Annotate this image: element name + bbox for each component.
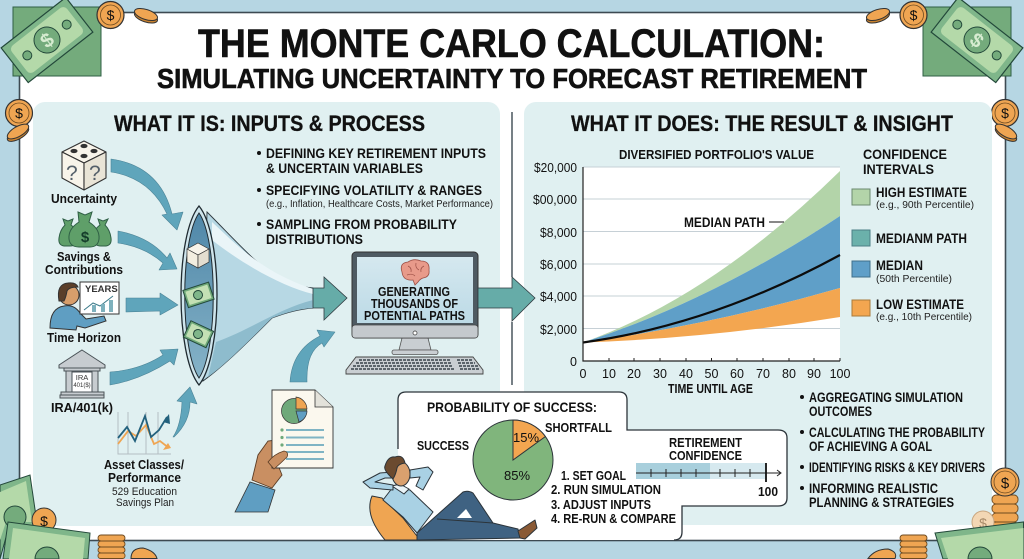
thumb [268,451,288,469]
arrow: assets [173,387,197,437]
pie chart [473,420,553,500]
input: time horizon [47,282,121,345]
arrow: document [290,330,335,382]
decoration: top-left money: $ [36,29,59,53]
y axis labels: $2,000 [540,323,577,337]
legend: high estimate [852,185,974,211]
pie chart: 15% [513,430,539,445]
y axis labels: $20,000 [534,161,577,175]
legend: confidence intervals: INTERVALS [863,161,934,177]
icon: brain [401,260,429,285]
cone shadow [208,300,313,377]
pie labels: SHORTFALL [545,420,612,435]
x axis labels: 40 [679,367,693,381]
icon: dice [62,141,106,190]
title [157,22,867,94]
screen text: THOUSANDS OF [371,297,458,311]
icon: bank [59,350,105,398]
x axis labels: 20 [627,367,641,381]
median path label: MEDIAN PATH [684,215,765,230]
x axis labels: 60 [730,367,744,381]
panel: what it is [33,102,500,526]
band: median [583,216,840,342]
x axis labels: 90 [807,367,821,381]
legend: median [852,258,952,285]
icon: dice: ? [66,162,78,185]
legend: confidence intervals: CONFIDENCE [863,146,947,162]
heading: PROBABILITY OF SUCCESS: [427,399,597,415]
arrow: savings [118,231,177,270]
document in hand [235,390,333,512]
steps list: 2. RUN SIMULATION [551,482,661,497]
bullet list: insights: OUTCOMES [809,404,872,419]
torso [383,487,433,533]
funnel mouth [181,206,217,385]
input: asset classes: Savings Plan [116,497,174,509]
bullet list: inputs: SAMPLING FROM PROBABILITY [266,216,458,232]
document [272,390,333,468]
computer [346,252,483,374]
document pie icon [282,397,307,424]
decoration: bottom-right money: $ [979,515,987,531]
decoration: top-left money: $ [15,105,23,121]
document lines [286,430,324,459]
y axis labels: $4,000 [540,290,577,304]
retirement confidence gauge: CONFIDENCE [669,448,742,463]
shoe [518,520,537,539]
axes [583,167,840,361]
divider [511,112,513,385]
x axis labels: 50 [705,367,718,381]
x axis labels: 100 [830,367,850,381]
icon: small bill [183,321,214,348]
x axis labels: 70 [756,367,770,381]
bullet list: inputs: & UNCERTAIN VARIABLES [266,160,423,176]
arrow: time horizon [126,293,178,315]
icon: money bags: $ [81,229,90,246]
right arm [410,467,433,490]
steps list: 3. ADJUST INPUTS [551,497,651,512]
monitor [352,252,478,338]
decoration: bottom-right money [868,468,1024,559]
y axis labels: $8,000 [540,226,577,240]
input: asset classes [104,412,184,509]
legend: high estimate: (e.g., 90th Percentile) [876,199,974,211]
icon: small bill [183,282,214,308]
panel: what it does [524,102,992,525]
funnel cone [203,212,313,381]
screen text: POTENTIAL PATHS [364,309,465,323]
steps list [551,468,676,526]
x axis title: TIME UNTIL AGE [668,381,753,396]
left arm [363,472,395,490]
panel: probability of success [398,392,787,540]
keyboard [346,357,483,374]
input: savings and contributions: Contributions [45,263,123,277]
bullet list: insights: OF ACHIEVING A GOAL [809,439,932,454]
median line [583,255,840,342]
input: savings and contributions [45,212,123,277]
x axis labels [580,367,850,381]
arrow: IRA [110,349,178,385]
decoration: top-left money: $ [107,7,115,23]
heading: what it does: WHAT IT DOES: THE RESULT & INSIGHT [571,111,953,136]
bullet list: inputs [257,145,493,247]
retirement confidence gauge: RETIREMENT [669,435,742,450]
retirement confidence gauge [636,435,781,499]
steps list: 1. SET GOAL [561,468,626,483]
icon: person with chart: YEARS [85,284,118,295]
head [392,462,410,486]
y axis labels: 0 [570,355,577,369]
steps list: 4. RE-RUN & COMPARE [551,511,676,526]
bullet list: inputs: DEFINING KEY RETIREMENT INPUTS [266,145,486,161]
plot area [583,167,840,361]
x ticks [609,358,840,361]
illustration: relaxing man [363,456,537,540]
icon: bank: IRA [76,373,88,382]
icon: small dice [187,243,209,268]
x axis labels: 30 [653,367,667,381]
input: time horizon: Time Horizon [47,331,121,345]
input: savings and contributions: Savings & [57,250,111,264]
icon: dice: ? [89,162,101,185]
decoration: bottom-left money: $ [40,513,48,529]
panel: probability of success: SUCCESS [417,438,469,453]
bullet list: inputs: (e.g., Inflation, Healthcare Costs, Market Performance) [266,198,493,210]
legend: medianm path: MEDIANM PATH [876,231,967,246]
hair [385,456,405,479]
legend: median: (50th Percentile) [876,273,952,285]
input: uncertainty [51,141,117,206]
screen text: GENERATING [378,285,450,299]
beanbag [370,496,420,540]
bullet list: insights: AGGREGATING SIMULATION [809,390,963,405]
decoration: top-left money [1,0,159,144]
band: low estimate [583,288,840,342]
arrows into funnel [110,159,335,437]
pie chart: 85% [504,468,530,483]
arrow: uncertainty [111,159,183,230]
hand [252,440,288,488]
cone highlight [212,222,313,294]
decoration: bottom-right money: $ [1001,475,1010,492]
y axis labels [533,161,577,369]
input: asset classes: Asset Classes/ [104,458,184,472]
legs [417,491,520,540]
icon: line chart [118,412,171,454]
title: THE MONTE CARLO CALCULATION: [198,22,825,66]
input: uncertainty: Uncertainty [51,192,117,206]
input: IRA/401(k): IRA/401(k) [51,400,113,415]
legend: low estimate: LOW ESTIMATE [876,297,964,312]
y axis labels: $6,000 [540,258,577,272]
decoration: top-right money: $ [1001,105,1009,121]
legend: confidence intervals [852,146,974,323]
title: SIMULATING UNCERTAINTY TO FORECAST RETIREMENT [157,63,867,94]
bullet list: insights: INFORMING REALISTIC [809,481,938,496]
screen text [364,285,465,323]
bullet list: inputs: SPECIFYING VOLATILITY & RANGES [266,182,482,198]
document dots [280,428,284,447]
legend: median: MEDIAN [876,258,923,273]
bullet list: inputs: DISTRIBUTIONS [266,231,363,247]
bullet list: insights: PLANNING & STRATEGIES [809,495,954,510]
arrow: computer to chart [478,277,535,321]
arrow: funnel to computer [313,277,347,320]
x axis labels: 0 [580,367,587,381]
legend: low estimate: (e.g., 10th Percentile) [876,311,972,323]
icon: bank: 401($) [73,383,91,389]
legend: low estimate [852,297,972,323]
decoration: top-right money: $ [910,7,918,23]
monitor stand [399,338,431,350]
band: high estimate [583,171,840,342]
input: asset classes: Performance [108,471,181,485]
funnel [181,206,313,385]
retirement confidence gauge: 100 [758,485,778,499]
legend: medianm path [852,230,967,246]
line chart: portfolio value [533,147,850,396]
decoration: bottom-left money [0,475,157,559]
input: IRA/401(k) [51,350,113,415]
legend: high estimate: HIGH ESTIMATE [876,185,967,200]
collar [392,484,409,494]
x axis labels: 10 [602,367,616,381]
y axis labels: $00,000 [533,193,577,207]
input: asset classes: 529 Education [112,486,177,498]
bullet list: insights [800,390,985,510]
x axis labels: 80 [782,367,796,381]
decoration: top-right money: $ [965,29,988,53]
heading: what it is: WHAT IT IS: INPUTS & PROCESS [114,111,425,136]
sleeve [235,482,275,512]
chart title: DIVERSIFIED PORTFOLIO'S VALUE [619,147,814,162]
decoration: top-right money [865,0,1023,144]
